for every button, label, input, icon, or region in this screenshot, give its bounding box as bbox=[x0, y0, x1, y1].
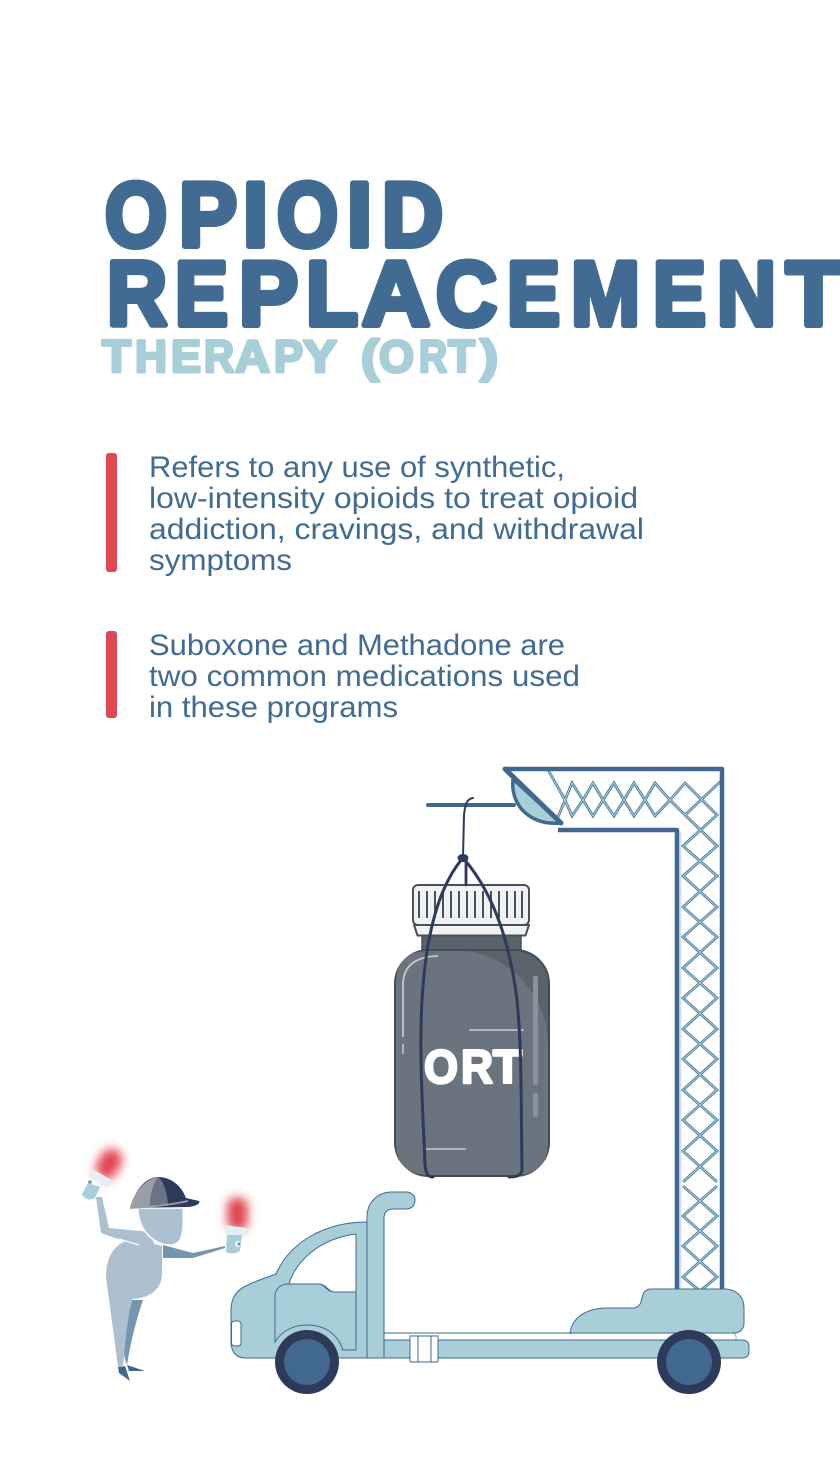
heading: opioid: O bbox=[105, 165, 167, 266]
ropes bbox=[421, 798, 522, 1177]
subheading: therapy: Y bbox=[303, 331, 337, 382]
back leg bbox=[123, 1300, 143, 1365]
text block: definition bbox=[106, 451, 644, 577]
subheading: therapy: R bbox=[419, 331, 447, 382]
title bbox=[102, 165, 840, 382]
heading: opioid: P bbox=[179, 165, 237, 266]
medicine bottle bbox=[395, 798, 549, 1177]
definition copy: Refers to any use of synthetic, bbox=[149, 451, 565, 484]
bottle label: R bbox=[461, 1040, 493, 1093]
subheading: therapy: P bbox=[274, 331, 303, 382]
heading: opioid: I bbox=[347, 165, 372, 266]
subheading: therapy: ) bbox=[480, 331, 498, 382]
text block: medications bbox=[106, 629, 580, 724]
heading: replacement: E bbox=[507, 244, 560, 345]
tower frame bbox=[505, 769, 722, 1292]
feet bbox=[118, 1366, 130, 1381]
raised arm bbox=[96, 1197, 155, 1246]
heading: replacement: T bbox=[786, 244, 840, 345]
chassis clamp bbox=[410, 1336, 438, 1362]
truck bbox=[231, 1192, 749, 1394]
extended arm bbox=[163, 1245, 225, 1258]
subheading: therapy: T bbox=[102, 331, 131, 382]
bottle cap bbox=[413, 885, 529, 936]
heading: replacement: N bbox=[717, 244, 776, 345]
front wheel bbox=[275, 1330, 339, 1394]
subheading: therapy: E bbox=[171, 331, 201, 382]
left flashlight bbox=[82, 1145, 127, 1199]
heading: replacement bbox=[107, 244, 840, 345]
bottle body bbox=[395, 950, 549, 1176]
heading: opioid: I bbox=[243, 165, 268, 266]
torso and front leg bbox=[106, 1239, 162, 1367]
definition copy: symptoms bbox=[149, 544, 292, 577]
definition copy: low-intensity opioids to treat opioid bbox=[149, 482, 638, 515]
crane tower bbox=[428, 768, 722, 1296]
red bar bbox=[106, 631, 117, 718]
heading: replacement: E bbox=[653, 244, 706, 345]
red bar bbox=[106, 453, 117, 572]
medications copy: in these programs bbox=[149, 691, 398, 724]
heading: replacement: M bbox=[571, 244, 640, 345]
bottle highlights bbox=[403, 956, 438, 1037]
heading: opioid bbox=[105, 165, 443, 266]
chassis upper rail bbox=[384, 1332, 572, 1334]
heading: replacement: P bbox=[239, 244, 298, 345]
head bbox=[138, 1208, 183, 1245]
bottle neck bbox=[422, 934, 521, 952]
cab bbox=[231, 1222, 367, 1358]
subheading: therapy: ( bbox=[361, 331, 379, 382]
bottle label: O bbox=[424, 1040, 458, 1093]
definition copy: addiction, cravings, and withdrawal bbox=[149, 513, 644, 546]
hard hat bbox=[130, 1177, 199, 1208]
exhaust stack bbox=[367, 1192, 415, 1358]
medications copy: two common medications used bbox=[149, 660, 580, 693]
lattice light strokes bbox=[547, 768, 721, 1296]
heading: replacement: C bbox=[436, 244, 497, 345]
rear body bbox=[570, 1289, 744, 1333]
chassis bbox=[384, 1340, 749, 1358]
heading: opioid: O bbox=[277, 165, 338, 266]
lattice dark strokes bbox=[547, 768, 721, 1296]
pulley bowl bbox=[513, 779, 561, 823]
heading: replacement: R bbox=[107, 244, 167, 345]
subheading: therapy: R bbox=[204, 331, 234, 382]
right flashlight bbox=[224, 1197, 248, 1253]
cab window bbox=[289, 1234, 356, 1292]
definition copy bbox=[149, 451, 644, 577]
bottle label: T bbox=[493, 1040, 522, 1093]
worker figure bbox=[82, 1145, 248, 1381]
subheading: therapy: T bbox=[448, 331, 475, 382]
subheading: therapy: H bbox=[135, 331, 167, 382]
rear wheel bbox=[657, 1330, 721, 1394]
heading: opioid: D bbox=[382, 165, 443, 266]
medications copy: Suboxone and Methadone are bbox=[149, 629, 565, 662]
medications copy bbox=[149, 629, 580, 724]
heading: replacement: E bbox=[175, 244, 228, 345]
headlight bbox=[232, 1321, 241, 1346]
heading: replacement: A bbox=[362, 244, 430, 345]
heading: replacement: L bbox=[306, 244, 358, 345]
hook arm bbox=[428, 803, 514, 807]
cab door bbox=[275, 1284, 356, 1350]
subheading: therapy: A bbox=[235, 331, 270, 382]
subheading: therapy: O bbox=[379, 331, 414, 382]
bottle label bbox=[424, 1040, 522, 1093]
subheading: therapy bbox=[102, 331, 498, 382]
